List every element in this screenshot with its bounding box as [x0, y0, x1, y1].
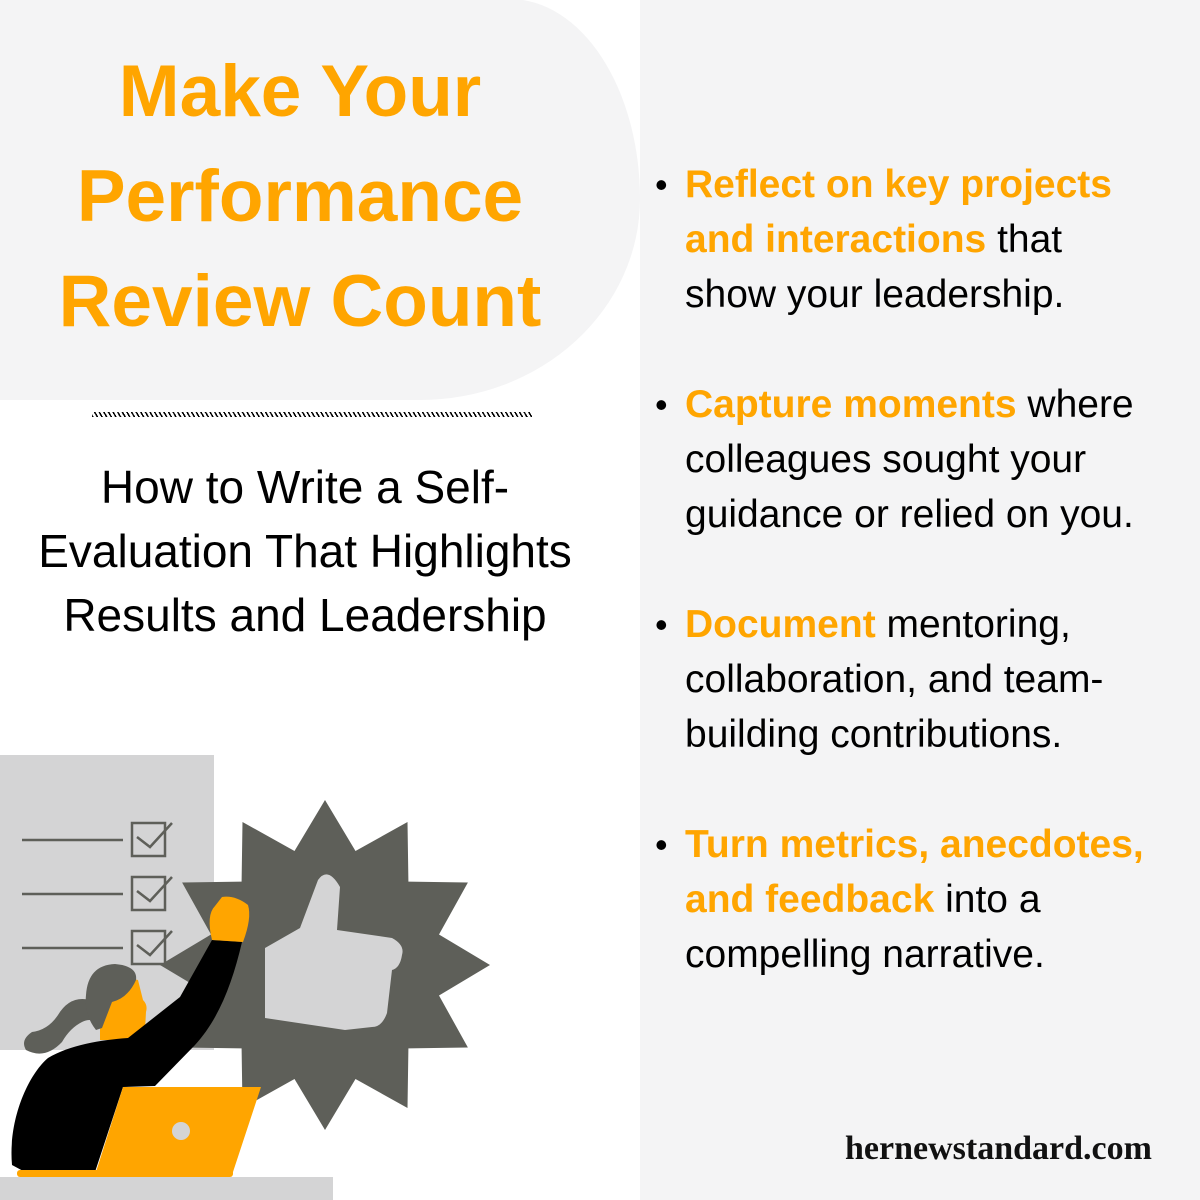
subtitle: How to Write a Self-	[101, 461, 509, 513]
bullet 2	[655, 383, 1134, 536]
bullet 3: •	[655, 604, 668, 645]
bullet 1: Reflect on key projects	[685, 163, 1112, 206]
divider	[92, 412, 532, 417]
bullet 2: guidance or relied on you.	[685, 493, 1134, 536]
panel: title background shape	[0, 0, 640, 400]
subtitle: Evaluation That Highlights	[38, 525, 572, 577]
bullet 1: show your leadership.	[685, 273, 1064, 316]
person	[11, 897, 249, 1172]
subtitle: Results and Leadership	[63, 589, 547, 641]
bullet 2: Capture moments where	[685, 383, 1134, 426]
desk	[0, 1177, 333, 1200]
bullet 3: collaboration, and team-	[685, 658, 1103, 701]
bullet 1: and interactions that	[685, 218, 1062, 261]
title: Performance	[77, 156, 523, 237]
icon: starburst with thumbs up	[160, 800, 490, 1130]
bullet 4: Turn metrics, anecdotes,	[685, 823, 1144, 866]
icon: laptop	[17, 1087, 261, 1177]
bullet 3	[655, 603, 1103, 756]
bullet 3: Document mentoring,	[685, 603, 1071, 646]
bullet 4: and feedback into a	[685, 878, 1041, 921]
bullet 4: compelling narrative.	[685, 933, 1045, 976]
subtitle	[38, 461, 572, 641]
footer url: hernewstandard.com	[845, 1130, 1152, 1167]
bullet 4	[655, 823, 1144, 976]
panel: right background	[640, 0, 1200, 1200]
bullet 1	[655, 163, 1112, 316]
bullet 1: •	[655, 164, 668, 205]
bullet 3: building contributions.	[685, 713, 1062, 756]
illustration	[0, 755, 490, 1200]
title: Make Your	[119, 51, 481, 132]
bullet 2: colleagues sought your	[685, 438, 1086, 481]
title	[59, 51, 541, 342]
bullet 2: •	[655, 384, 668, 425]
bullet 4: •	[655, 824, 668, 865]
checklist panel	[0, 755, 214, 1050]
title: Review Count	[59, 261, 541, 342]
